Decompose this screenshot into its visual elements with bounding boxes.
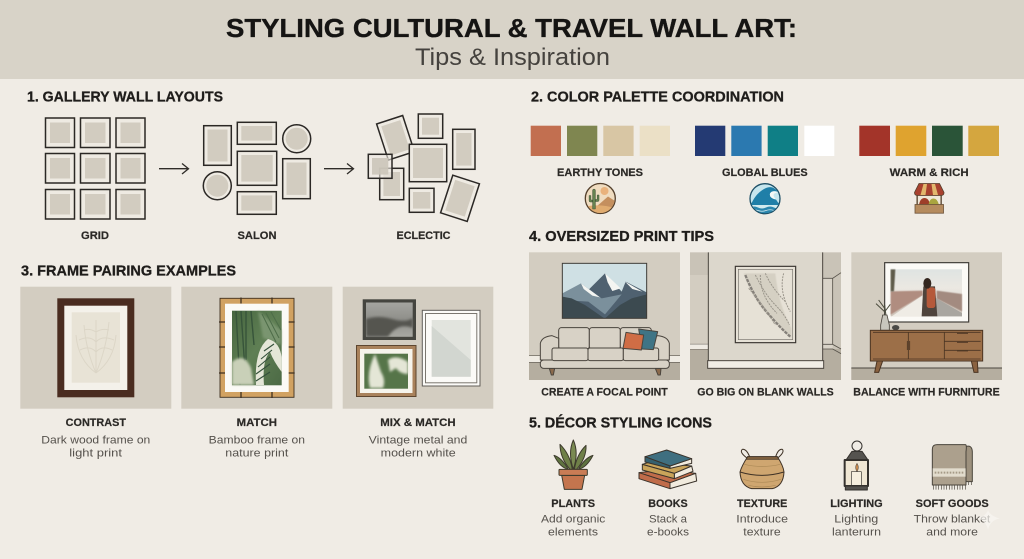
heading: oversized print tips: 4. OVERSIZED PRINT TIPS bbox=[529, 229, 714, 245]
layout: salon bbox=[203, 122, 311, 214]
label: eclectic: ECLECTIC bbox=[396, 230, 451, 242]
icon: woven basket bbox=[740, 449, 784, 489]
label: match: MATCH bbox=[237, 417, 277, 429]
section 2: color palette coordination bbox=[531, 90, 999, 215]
label: earthy tones: EARTHY TONES bbox=[557, 167, 643, 179]
section 3: frame pairing examples bbox=[20, 264, 493, 460]
wood frame with botanical print bbox=[356, 346, 416, 396]
layout: grid bbox=[46, 118, 145, 219]
description: soft goods bbox=[914, 513, 991, 538]
travel photo print bbox=[885, 263, 969, 322]
label: texture: TEXTURE bbox=[737, 498, 787, 510]
description: lighting bbox=[832, 513, 881, 538]
palette: global blues bbox=[695, 126, 834, 156]
label: salon: SALON bbox=[238, 230, 277, 242]
description: lighting: Lighting bbox=[834, 513, 878, 525]
label: grid: GRID bbox=[81, 230, 109, 242]
sofa bbox=[540, 328, 669, 375]
section 4: oversized print tips bbox=[529, 229, 1002, 399]
icon: lantern bbox=[845, 441, 868, 490]
vintage metal frame bbox=[363, 299, 416, 340]
map print bbox=[735, 266, 796, 343]
label: create a focal point: CREATE A FOCAL POINT bbox=[541, 387, 668, 399]
arrow: salon to eclectic bbox=[324, 164, 354, 174]
heading: gallery wall layouts: 1. GALLERY WALL LAYOUTS bbox=[27, 90, 223, 106]
panel: match bbox=[181, 287, 332, 409]
label: books: BOOKS bbox=[648, 498, 688, 510]
panel: create a focal point bbox=[529, 252, 680, 380]
arrow: grid to salon bbox=[159, 164, 188, 174]
heading: frame pairing: 3. FRAME PAIRING EXAMPLES bbox=[21, 264, 236, 280]
panel: go big on blank walls bbox=[690, 252, 841, 380]
panel: mix and match bbox=[343, 287, 493, 409]
header banner bbox=[0, 0, 1024, 79]
description: contrast: light print bbox=[69, 448, 123, 460]
label: warm and rich: WARM & RICH bbox=[890, 167, 969, 179]
layout: eclectic bbox=[368, 114, 479, 221]
bamboo frame bbox=[219, 298, 295, 398]
description: mix and match bbox=[369, 434, 467, 460]
icon: plant in pot bbox=[554, 440, 593, 489]
panel: contrast bbox=[20, 287, 171, 409]
mountain print bbox=[562, 263, 647, 318]
label: soft goods: SOFT GOODS bbox=[916, 498, 989, 510]
description: books: Stack a bbox=[649, 513, 688, 525]
description: match: Bamboo frame on bbox=[209, 434, 305, 446]
description: match: nature print bbox=[225, 448, 289, 460]
modern white frame bbox=[422, 310, 480, 386]
icon: stack of books bbox=[639, 450, 697, 489]
title: STYLING CULTURAL & TRAVEL WALL ART: bbox=[226, 15, 797, 43]
label: plants: PLANTS bbox=[551, 498, 595, 510]
description: soft goods: Throw blanket bbox=[914, 513, 991, 525]
label: lighting: LIGHTING bbox=[830, 498, 883, 510]
sparkle watermark bbox=[977, 510, 1000, 530]
heading: decor styling: 5. DÉCOR STYLING ICONS bbox=[529, 415, 712, 432]
description: plants: Add organic bbox=[541, 513, 606, 525]
description: match bbox=[209, 434, 305, 460]
label: contrast: CONTRAST bbox=[66, 417, 126, 429]
description: soft goods: and more bbox=[926, 526, 978, 538]
section 5: decor styling icons bbox=[529, 415, 991, 538]
label: global blues: GLOBAL BLUES bbox=[722, 167, 808, 179]
description: texture bbox=[736, 513, 788, 538]
description: contrast: Dark wood frame on bbox=[41, 434, 150, 446]
icon: ocean wave bbox=[750, 184, 782, 215]
subtitle: Tips & Inspiration bbox=[415, 44, 610, 71]
icon: market stall bbox=[914, 184, 944, 213]
label: go big on blank walls: GO BIG ON BLANK WALLS bbox=[697, 387, 834, 399]
description: plants bbox=[541, 513, 606, 538]
description: plants: elements bbox=[548, 526, 598, 538]
vase with branches bbox=[876, 300, 899, 330]
description: mix and match: modern white bbox=[381, 448, 456, 460]
dark wood frame bbox=[57, 298, 134, 397]
description: books bbox=[647, 513, 689, 538]
description: contrast bbox=[41, 434, 150, 460]
label: balance with furniture: BALANCE WITH FURNITURE bbox=[853, 387, 1000, 399]
icon: desert cactus bbox=[584, 184, 618, 215]
panel: balance with furniture bbox=[851, 252, 1002, 380]
heading: color palette: 2. COLOR PALETTE COORDINATION bbox=[531, 90, 784, 106]
description: texture: Introduce bbox=[736, 513, 788, 525]
description: lighting: lanterurn bbox=[832, 526, 881, 538]
palette: warm and rich bbox=[859, 126, 999, 156]
label: mix and match: MIX & MATCH bbox=[380, 417, 456, 429]
credenza bbox=[870, 330, 983, 372]
palette: earthy tones bbox=[531, 126, 670, 156]
description: books: e-books bbox=[647, 526, 689, 538]
icon: folded blanket bbox=[932, 445, 972, 490]
description: mix and match: Vintage metal and bbox=[369, 434, 467, 446]
description: texture: texture bbox=[743, 526, 781, 538]
section 1: gallery wall layouts bbox=[27, 90, 479, 242]
